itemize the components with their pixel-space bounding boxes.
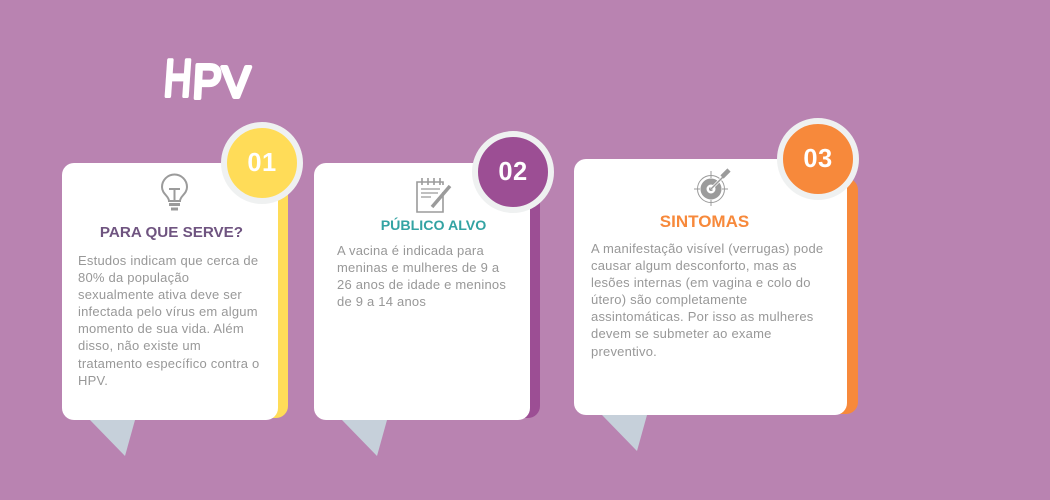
number badge 03 xyxy=(777,118,859,200)
body text: útero) são completamente xyxy=(591,292,747,307)
icon: notepad and pencil xyxy=(416,178,452,213)
heading: PÚBLICO ALVO xyxy=(381,218,486,234)
icon: light bulb xyxy=(161,174,188,210)
body text: assintomáticas. Por isso as mulheres xyxy=(591,309,814,324)
body text xyxy=(78,253,259,388)
panel accent: orange backing xyxy=(694,178,858,414)
body text xyxy=(337,243,506,309)
icon: target with arrow xyxy=(694,168,730,206)
card body xyxy=(62,163,278,420)
body text: 80% da população xyxy=(78,270,189,285)
body text: sexualmente ativa deve ser xyxy=(78,287,242,302)
body text: A manifestação visível (verrugas) pode xyxy=(591,241,823,256)
panel accent: purple backing xyxy=(414,163,540,418)
card body xyxy=(574,159,847,415)
title xyxy=(162,49,252,109)
body text: A vacina é indicada para xyxy=(337,243,484,258)
heading: PARA QUE SERVE? xyxy=(100,224,243,241)
body text: tratamento específico contra o xyxy=(78,356,259,371)
number badge 01 xyxy=(221,122,303,204)
pointer tail xyxy=(342,420,387,456)
body text: lesões internas (em vagina e colo do xyxy=(591,275,811,290)
heading: SINTOMAS xyxy=(660,212,749,231)
body text: Estudos indicam que cerca de xyxy=(78,253,258,268)
title: P xyxy=(191,55,223,109)
body text: preventivo. xyxy=(591,344,657,359)
body text: disso, não existe um xyxy=(78,338,201,353)
body text: momento de sua vida. Além xyxy=(78,321,244,336)
body text: HPV. xyxy=(78,373,108,388)
body text: infectada pelo vírus em algum xyxy=(78,304,258,319)
pointer tail xyxy=(602,415,647,451)
title: H xyxy=(162,49,194,107)
body text: devem se submeter ao exame xyxy=(591,326,772,341)
number badge 03: 03 xyxy=(803,145,833,173)
panel accent: yellow backing xyxy=(162,163,288,418)
body text: meninas e mulheres de 9 a xyxy=(337,260,499,275)
pointer tail xyxy=(90,420,135,456)
number badge 02: 02 xyxy=(498,158,528,186)
number badge 01: 01 xyxy=(247,149,277,177)
number badge 02 xyxy=(472,131,554,213)
panel: publico alvo xyxy=(314,131,554,456)
body text: causar algum desconforto, mas as xyxy=(591,258,797,273)
panel: para que serve xyxy=(62,122,303,456)
body text: 26 anos de idade e meninos xyxy=(337,277,506,292)
panel: sintomas xyxy=(574,118,859,451)
body text: de 9 a 14 anos xyxy=(337,294,426,309)
card body xyxy=(314,163,530,420)
title: V xyxy=(222,58,251,107)
body text xyxy=(591,241,823,359)
